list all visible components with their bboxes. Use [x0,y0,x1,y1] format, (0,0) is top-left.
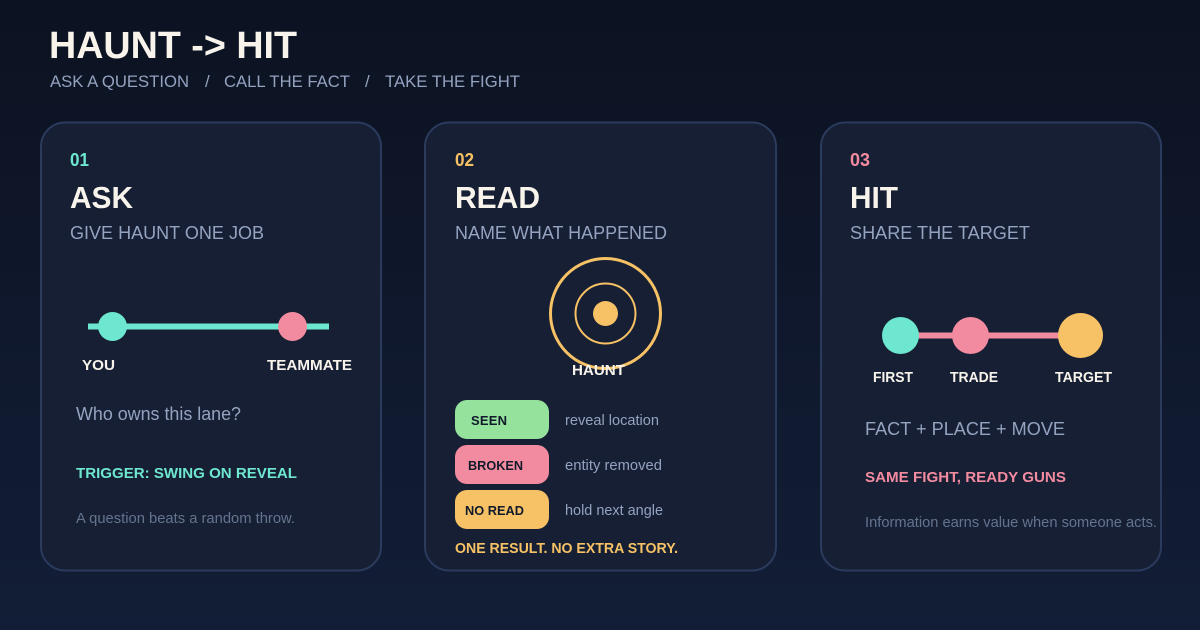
panel: ask [41,122,381,570]
result row: seen [455,400,659,439]
result row: broken: BROKEN [468,458,523,473]
subtitle: CALL THE FACT [224,72,350,91]
heading: hit: HIT [850,180,898,215]
heading: ask: ASK [70,180,134,215]
diagram: haunt target rings [550,258,660,379]
formula text: FACT + PLACE + MOVE [865,419,1065,439]
result row: no read [455,490,663,529]
diagram: first trade target chain: TARGET [1055,370,1112,386]
step number 01: 01 [70,150,89,170]
callout: one result: ONE RESULT. NO EXTRA STORY. [455,541,678,557]
diagram: haunt target rings: HAUNT [572,362,625,379]
diagram: you to teammate lane [82,312,352,374]
diagram: first trade target chain: TRADE [950,370,998,386]
step number 02: 02 [455,150,474,170]
question text: Who owns this lane? [76,404,241,424]
diagram: you to teammate lane: TEAMMATE [267,357,352,374]
diagram: first trade target chain: FIRST [873,370,913,386]
note: hit: Information earns value when someone acts. [865,515,1157,531]
diagram: first trade target chain [873,313,1112,386]
heading: read: READ [455,180,540,215]
panel: read [425,122,776,570]
trigger callout: TRIGGER: SWING ON REVEAL [76,465,297,482]
result row: broken: entity removed [565,458,662,474]
title: HAUNT -> HIT [49,25,297,67]
subtitle: / [205,72,210,91]
subtitle [50,72,520,91]
diagram: you to teammate lane: YOU [82,357,115,374]
result row: no read: NO READ [465,503,524,518]
subtitle: ASK A QUESTION [50,72,189,91]
result row: seen: reveal location [565,413,659,429]
callout: same fight: SAME FIGHT, READY GUNS [865,469,1066,486]
result row: seen: SEEN [471,413,507,428]
subheading: ask: GIVE HAUNT ONE JOB [70,223,264,243]
panel: hit [821,122,1161,570]
subtitle: TAKE THE FIGHT [385,72,520,91]
result row: broken [455,445,662,484]
step number 03: 03 [850,150,870,170]
note: ask: A question beats a random throw. [76,511,295,527]
subheading: read: NAME WHAT HAPPENED [455,223,667,243]
subheading: hit: SHARE THE TARGET [850,223,1030,243]
result row: no read: hold next angle [565,503,663,519]
subtitle: / [365,72,370,91]
